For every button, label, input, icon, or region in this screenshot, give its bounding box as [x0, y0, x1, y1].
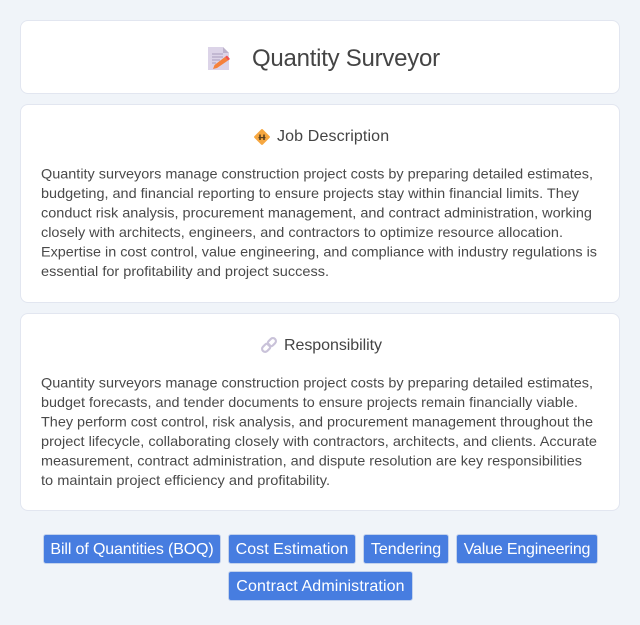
text block: responsibility: budget forecasts, and tender documents to ensure projects remain financially viable. [41, 394, 578, 410]
title text: Quantity Surveyor [252, 45, 440, 72]
text block: job description: conduct risk analysis, procurement management, and contract administration, working [41, 204, 592, 220]
tag: cost estimation: Cost Estimation [236, 541, 348, 558]
tag: tendering [363, 534, 449, 564]
tag: bill of quantities [43, 534, 221, 564]
text block: job description: closely with architects, engineers, and contractors to optimize resource allocation. [41, 224, 563, 240]
text block: job description [41, 166, 597, 279]
tag: tendering: Tendering [371, 541, 441, 558]
tag: value engineering [456, 534, 598, 564]
text block: job description: Quantity surveyors manage construction project costs by preparing detailed estimates, [41, 166, 593, 182]
panel: title [20, 20, 620, 94]
text block: responsibility: to maintain project efficiency and profitability. [41, 472, 330, 488]
text block: job description: essential for profitability and project success. [41, 263, 329, 279]
tag: contract administration: Contract Administration [236, 578, 405, 595]
text block: responsibility: They perform cost control, risk analysis, and procurement management throughout the [41, 414, 593, 430]
text block: job description: Expertise in cost control, value engineering, and compliance with industry regulations is [41, 244, 597, 260]
text block: responsibility: Quantity surveyors manage construction project costs by preparing detailed estimates, [41, 374, 593, 390]
text block: job description: budgeting, and financial reporting to ensure projects stay within financial limits. They [41, 185, 579, 201]
heading: responsibility: Responsibility [284, 337, 382, 354]
icon: construction diamond [254, 129, 270, 145]
tag: cost estimation [228, 534, 356, 564]
icon: document with pencil [208, 47, 230, 70]
heading: job description: Job Description [277, 128, 389, 145]
text block: responsibility: measurement, contract administration, and dispute resolution are key responsibilities [41, 452, 582, 468]
panel: responsibility [20, 313, 620, 511]
panel: job description [20, 104, 620, 303]
tag: value engineering: Value Engineering [464, 541, 590, 558]
tag: bill of quantities: Bill of Quantities (BOQ) [50, 541, 214, 558]
icon: link [261, 337, 277, 353]
text block: responsibility [41, 374, 597, 488]
text block: responsibility: project lifecycle, collaborating closely with contractors, architects, and clients. Accurate [41, 433, 597, 449]
tag: contract administration [228, 571, 413, 601]
